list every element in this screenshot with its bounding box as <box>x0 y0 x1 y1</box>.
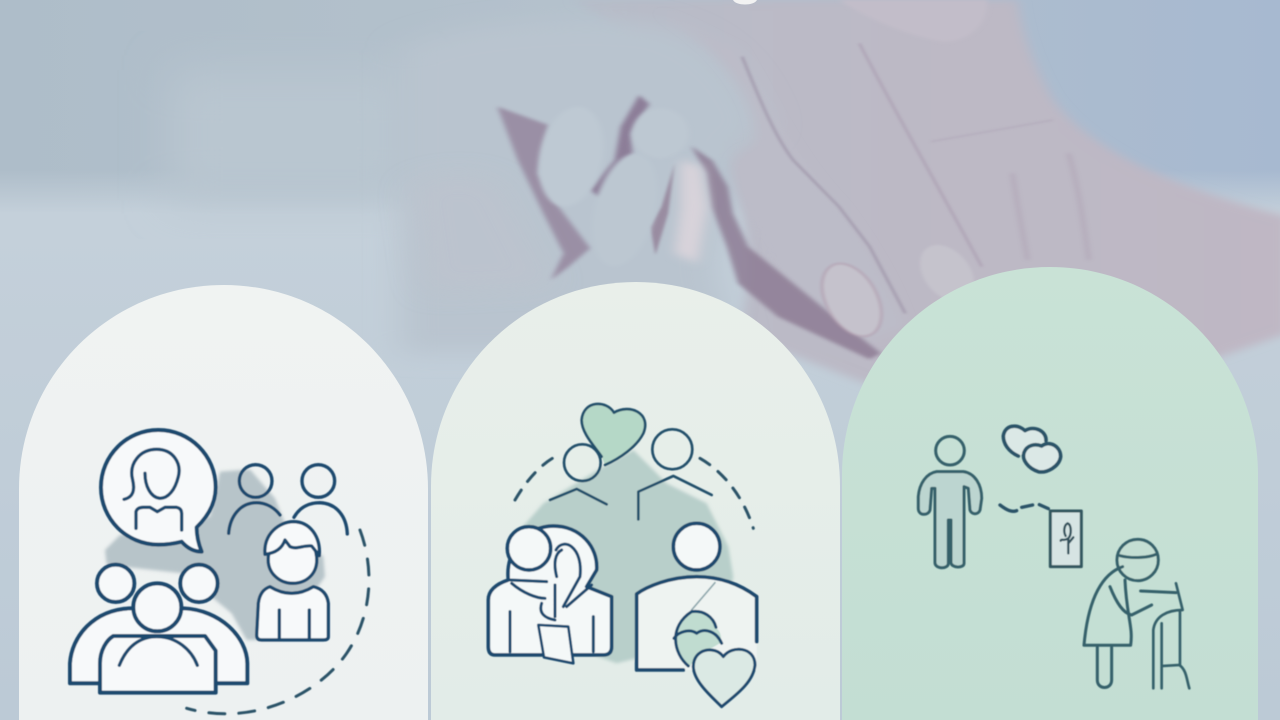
carer and visitor figures <box>488 526 612 655</box>
patient body <box>637 577 757 670</box>
two colleagues behind <box>229 465 347 534</box>
hands holding heart <box>676 611 721 666</box>
handoff dashes <box>1000 505 1048 511</box>
bottom heart <box>693 649 755 707</box>
boy figure <box>257 587 328 640</box>
background photo: held hands, tinted <box>0 0 1280 466</box>
back row heads <box>97 565 134 602</box>
thumb <box>846 0 984 5</box>
panel: centre arch <box>431 282 840 720</box>
dark creases between fingers <box>497 107 590 280</box>
gift card with plant <box>1050 511 1081 567</box>
clipboard <box>538 625 573 663</box>
two floating hearts <box>1003 426 1061 472</box>
icon: carers and patient with hearts <box>488 404 757 707</box>
front head <box>133 583 181 631</box>
grey watercolour blob <box>105 469 325 640</box>
finger lines and nails <box>742 57 905 313</box>
speech bubble <box>101 430 216 552</box>
panel: left arch <box>19 285 428 720</box>
panel: right arch <box>842 267 1258 720</box>
dashed arcs <box>515 456 753 528</box>
standing visitor <box>918 436 982 568</box>
blue left hand <box>408 37 741 346</box>
two upper figures <box>550 429 712 519</box>
crowd bodies <box>70 608 247 683</box>
icon: visitor offering gift to elderly person <box>918 426 1189 688</box>
icon: group of people with speech bubble <box>70 430 369 714</box>
patient head <box>673 523 720 570</box>
upper finger of right hand <box>655 10 905 340</box>
woman in bubble <box>124 449 182 530</box>
finger highlights <box>536 126 598 206</box>
elderly person with walker <box>1084 539 1189 688</box>
dashed arc <box>187 530 369 714</box>
pink arm and right hand <box>724 0 1280 383</box>
top heart <box>582 404 645 465</box>
green-grey watercolour blob <box>520 450 733 663</box>
